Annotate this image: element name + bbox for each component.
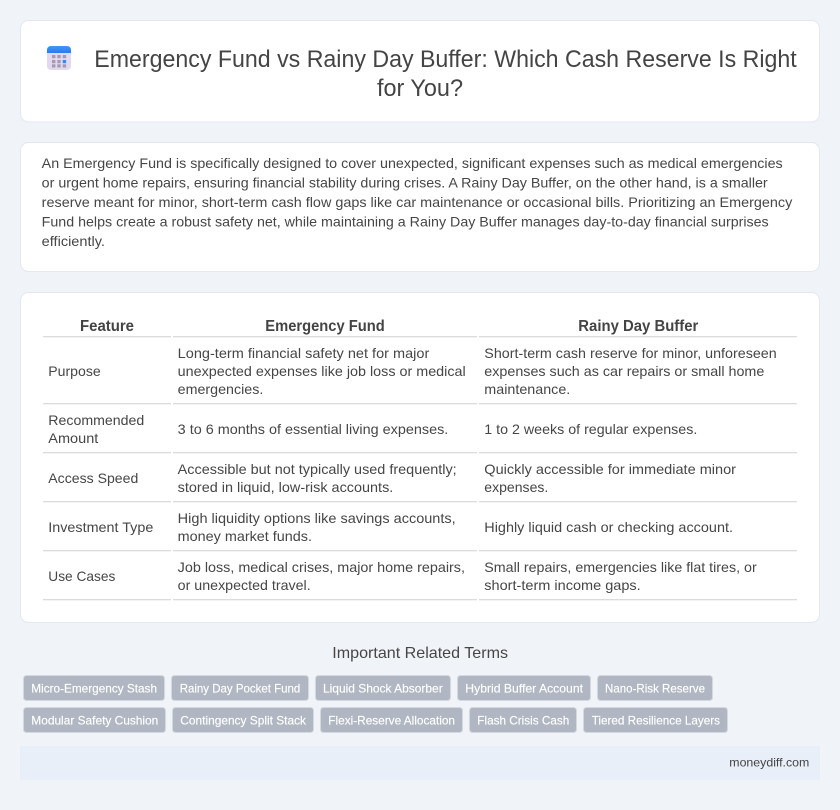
title: Emergency Fund vs Rainy Day Buffer: Which Cash Reserve Is Right xyxy=(94,46,797,73)
heading: important related terms: Important Related Terms xyxy=(332,645,508,662)
table row: recommended amount: 3 to 6 months of essential living expenses. xyxy=(178,421,448,437)
table row: investment type: Investment Type xyxy=(48,519,154,535)
tag: Hybrid Buffer Account: Hybrid Buffer Account xyxy=(465,681,584,695)
tag: Contingency Split Stack xyxy=(172,708,314,732)
table row: use cases: Job loss, medical crises, major home repairs, xyxy=(178,559,465,575)
tag: Liquid Shock Absorber: Liquid Shock Absorber xyxy=(323,681,443,695)
tag: Nano-Risk Reserve: Nano-Risk Reserve xyxy=(605,681,705,695)
table header: Feature xyxy=(80,318,134,335)
table row: purpose xyxy=(48,345,777,397)
tag: Contingency Split Stack: Contingency Split Stack xyxy=(180,713,307,727)
table row: use cases: Small repairs, emergencies like flat tires, or xyxy=(484,559,757,575)
table row: use cases: or unexpected travel. xyxy=(178,577,311,593)
title xyxy=(94,46,797,102)
table header: Rainy Day Buffer xyxy=(578,318,698,335)
table header: Emergency Fund xyxy=(265,318,385,335)
table row: purpose: expenses such as car repairs or small home xyxy=(484,363,765,379)
table row: use cases: short-term income gaps. xyxy=(484,577,641,593)
table row: purpose: Short-term cash reserve for minor, unforeseen xyxy=(484,345,777,361)
table row: investment type: High liquidity options like savings accounts, xyxy=(178,510,456,526)
tag: Flexi-Reserve Allocation: Flexi-Reserve Allocation xyxy=(328,713,455,727)
tag: Modular Safety Cushion xyxy=(24,708,166,732)
table row: investment type: Highly liquid cash or checking account. xyxy=(484,519,733,535)
tag: Modular Safety Cushion: Modular Safety Cushion xyxy=(31,713,158,727)
table row: purpose: Purpose xyxy=(48,363,101,379)
table row: use cases xyxy=(48,559,757,593)
tag: Micro-Emergency Stash: Micro-Emergency Stash xyxy=(31,681,157,695)
panel: introduction xyxy=(20,142,820,272)
text block: introduction paragraph: efficiently. xyxy=(42,233,105,249)
tag: Rainy Day Pocket Fund xyxy=(172,676,308,700)
table row: access speed: Accessible but not typically used frequently; xyxy=(178,461,457,477)
panel: comparison table xyxy=(20,292,820,622)
tag: Rainy Day Pocket Fund: Rainy Day Pocket Fund xyxy=(180,681,300,695)
tag: Nano-Risk Reserve xyxy=(598,676,712,700)
tag: Flash Crisis Cash: Flash Crisis Cash xyxy=(477,713,569,727)
table header xyxy=(80,318,698,335)
footer: site name: moneydiff.com xyxy=(729,756,809,770)
tag: Micro-Emergency Stash xyxy=(24,676,164,700)
icon: calendar xyxy=(47,46,71,70)
footer bar xyxy=(20,746,820,780)
table row: use cases: Use Cases xyxy=(48,568,115,584)
tag: Tiered Resilience Layers xyxy=(584,708,728,732)
text block: introduction paragraph: An Emergency Fund is specifically designed to cover unexpected, significant expenses such as medical emergencies xyxy=(42,155,783,171)
text block: introduction paragraph: reserve meant for minor, short-term cash flow gaps like car maintenance or occasional bills. Prioritizing an Emergency xyxy=(42,194,792,210)
tag: Hybrid Buffer Account xyxy=(458,676,590,700)
table row: purpose: emergencies. xyxy=(178,381,263,397)
table row: access speed: expenses. xyxy=(484,479,548,495)
table row: investment type xyxy=(48,510,733,544)
table row: purpose: Long-term financial safety net for major xyxy=(178,345,430,361)
table row: investment type: money market funds. xyxy=(178,528,312,544)
title: for You? xyxy=(377,75,463,102)
tag: Flexi-Reserve Allocation xyxy=(320,708,462,732)
tag: Flash Crisis Cash xyxy=(470,708,576,732)
table row: purpose: maintenance. xyxy=(484,381,570,397)
text block: introduction paragraph xyxy=(42,155,792,249)
tag: Tiered Resilience Layers: Tiered Resilience Layers xyxy=(592,713,720,727)
table row: recommended amount xyxy=(48,412,697,446)
table row: recommended amount: Recommended xyxy=(48,412,144,428)
table row: recommended amount: 1 to 2 weeks of regular expenses. xyxy=(484,421,697,437)
table row: purpose: unexpected expenses like job loss or medical xyxy=(178,363,466,379)
tag list: related terms xyxy=(24,676,728,732)
table row: access speed xyxy=(48,461,736,495)
panel: title header xyxy=(20,20,820,122)
table row: access speed: Access Speed xyxy=(48,470,138,486)
table row: access speed: stored in liquid, low-risk accounts. xyxy=(178,479,393,495)
text block: introduction paragraph: or urgent home repairs, ensuring financial stability during crises. A Rainy Day Buffer, on the other hand, is a smaller xyxy=(42,174,768,190)
table row: access speed: Quickly accessible for immediate minor xyxy=(484,461,736,477)
table row: recommended amount: Amount xyxy=(48,430,98,446)
text block: introduction paragraph: Fund helps create a robust safety net, while maintaining a Rainy Day Buffer manages day-to-day financial surprises xyxy=(42,214,769,230)
tag: Liquid Shock Absorber xyxy=(316,676,450,700)
